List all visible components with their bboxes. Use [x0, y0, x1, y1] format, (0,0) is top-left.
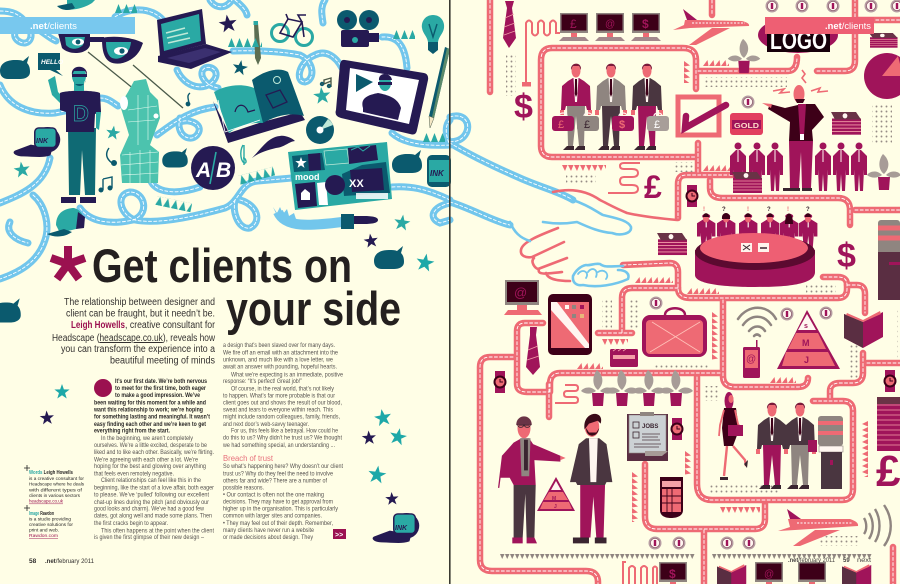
intro standfirst text: Headscape (headscape.co.uk), reveals how — [52, 333, 216, 344]
illustration: designer figure with D shirt: D — [73, 101, 89, 126]
meeting table with people: ? — [806, 207, 810, 213]
folio left: .net/february 2011 — [45, 558, 94, 565]
banner: .net/clients right — [765, 17, 874, 34]
article column one: want this relationship to work; we’re hoping — [93, 408, 203, 414]
title: Get clients on — [92, 239, 352, 292]
icon: coin above bag — [650, 296, 662, 310]
icon: music notes — [99, 78, 331, 192]
monitors row top — [559, 13, 661, 41]
meeting table with people: ! — [787, 207, 789, 213]
article column two: • Our contact is often not the one making — [223, 493, 324, 499]
icon: bottom cap — [47, 208, 85, 236]
icon: watch — [686, 185, 698, 207]
icon: pink briefcase — [642, 308, 707, 357]
three businessmen with briefcases: £ — [654, 119, 660, 131]
sidebar credits: Words Leigh Howells — [29, 470, 73, 476]
icon: pound sign right: £ — [876, 447, 900, 496]
icon: magenta asterisk — [51, 246, 85, 279]
icon: compact disc — [306, 116, 334, 144]
icon: small pyramid: J — [554, 504, 557, 510]
icon: sound waves — [864, 505, 891, 546]
article column one: the first cracks begin to appear. — [94, 521, 168, 527]
article column two: client goes out and shows the result of our blood, — [223, 400, 342, 406]
teal grass triangles — [115, 4, 445, 212]
icon: keypad card — [610, 349, 638, 367]
article column one: In the beginning, we aren’t completely — [101, 436, 193, 442]
illustration: designer figure with D shirt — [48, 67, 101, 203]
icon: S M J pyramid: J — [804, 355, 809, 365]
icon: moustache — [252, 136, 295, 158]
folio left: 58 — [29, 558, 37, 565]
article column one: easy finding each other and we’re keen to get — [94, 422, 206, 428]
icon: plant right — [867, 154, 900, 190]
article column two: For us, this feels like a betrayal. How could he — [231, 429, 339, 435]
woman with folder — [719, 392, 748, 480]
article column one: It’s our first date. We’re both nervous — [115, 379, 208, 385]
water cooler lower — [818, 416, 843, 489]
icon: bicycle — [272, 14, 312, 46]
intro standfirst text: beautiful meeting of minds — [110, 356, 215, 366]
article column two: possible reasons. — [223, 485, 264, 491]
article column two: • They may feel out of their depth. Remember, — [223, 521, 333, 527]
intro standfirst text: , creative consultant for — [125, 320, 216, 331]
icon: small pyramid: M — [552, 496, 556, 502]
icon: spilled ink pot, lower — [373, 513, 419, 543]
intro standfirst text — [52, 297, 216, 366]
folio right — [788, 558, 871, 564]
article column two: Breach of trust — [223, 454, 274, 463]
icon: laptop — [157, 9, 232, 69]
intro standfirst text: client can be fraught, but it needn’t be. — [66, 308, 215, 320]
decorative dots — [506, 54, 900, 546]
pink road network — [480, 0, 900, 584]
icon: cash stack near table — [657, 233, 687, 255]
meeting table with people: ! — [747, 207, 749, 213]
icon: light bulb — [422, 15, 444, 54]
meeting table with people — [695, 207, 817, 287]
water cooler top right — [878, 220, 900, 300]
article column two — [222, 343, 344, 541]
icon: open book — [213, 70, 305, 143]
article column one: to meet for the first time, both eager — [115, 386, 207, 392]
sidebar credits: creative solutions for — [29, 522, 73, 527]
article column one: beginning, like the start of a love affair, both eager — [94, 485, 214, 491]
meeting table with people: ? — [767, 207, 771, 213]
icon: dollar sign left: $ — [514, 88, 533, 126]
folio right: .net/february 2011 — [788, 558, 836, 564]
article column one: that feels even remotely negative. — [94, 471, 174, 477]
article column one: liked and to like each other. Basically, we’re flirting. — [94, 450, 214, 456]
title: your side — [226, 282, 401, 335]
icon: ink pot right: INK — [430, 169, 445, 178]
icon: moodboard: XX — [349, 178, 364, 190]
meeting table with people: ? — [722, 207, 726, 213]
icon: calculator — [660, 477, 683, 518]
icon: tablet device — [548, 294, 592, 355]
intro standfirst text: The relationship between designer and — [64, 297, 215, 308]
sidebar credits: is a studio providing — [29, 516, 71, 522]
article column two: common with larger sites and companies. — [223, 514, 322, 520]
article column two: We fire off an email with an attachment into the — [223, 350, 339, 356]
article column two: higher up in the organisation. This is particularly — [223, 507, 338, 513]
banner: .net/clients left — [0, 17, 135, 34]
icon: mobile phone: @ — [746, 354, 756, 365]
bottom monitors and books: @ — [764, 569, 774, 580]
sidebar credits: Rawdon.com — [29, 533, 58, 538]
article column one — [93, 379, 214, 541]
icons: speech bubbles — [0, 56, 422, 322]
article column two: do this to us? Why didn’t he trust us? We thought — [223, 436, 342, 442]
lower left stars — [39, 233, 436, 505]
icon: big checkmark box — [678, 97, 726, 135]
icon: tie left — [526, 327, 540, 375]
article column one: to please. We’ve ‘pulled’ following our excellent — [94, 493, 209, 499]
jobs clipboard: JOBS — [642, 424, 658, 430]
icon: aeroplane top — [673, 9, 749, 45]
intro standfirst text: Leigh Howells — [71, 320, 125, 331]
icon: watches mid row — [494, 370, 896, 440]
icon: coins top row — [766, 0, 900, 12]
article column two: sweat and tears to everyone within reach. This — [223, 407, 333, 413]
three businessmen with briefcases: $ — [619, 119, 625, 131]
icon: hello speech bubble: HELLO — [41, 59, 63, 66]
icon: cash stack by boss — [831, 112, 861, 135]
article column two: might include random colleagues, family, friends, — [223, 415, 340, 421]
article column two: trust us? Why do they feel the need to involve — [223, 471, 334, 477]
article column one: dates, got along well and made some plans. Then — [94, 514, 212, 520]
angry boss figure — [762, 70, 828, 191]
continue arrow box — [333, 529, 346, 539]
article column two: So what’s happening here? Why doesn’t our client — [223, 464, 343, 470]
sidebar credits: clients in various sectors — [29, 493, 81, 498]
icon: ink pot right — [427, 155, 451, 187]
icon: logo badge: LOGO — [770, 27, 827, 55]
monitors row top: $ — [642, 17, 649, 31]
continue arrow box: >> — [335, 532, 343, 539]
icon: glasses on sticks — [58, 33, 183, 108]
icon: aeroplane lower — [778, 509, 858, 546]
icon: paint brush — [273, 207, 378, 229]
three businessmen with briefcases: £ — [558, 119, 564, 131]
icon: monitor left with at sign — [504, 280, 542, 315]
article column two: await an answer with pounding, hopeful hearts. — [223, 365, 337, 371]
sidebar credits: with different types of — [29, 487, 83, 492]
icon: cash block right edge — [877, 397, 900, 451]
sidebar credits — [24, 465, 85, 538]
icon: gold bar: GOLD — [734, 121, 760, 130]
icon: pound sign: £ — [644, 169, 662, 205]
icon: A/B badge: A — [195, 159, 211, 182]
plants row — [581, 370, 693, 406]
icon: A/B badge: B — [216, 159, 231, 182]
article column two: Of course, in the real world, that’s not likely — [231, 386, 334, 392]
monitors row top: @ — [605, 19, 615, 30]
article column two: we had something special, an understanding ... — [222, 443, 335, 449]
article column one: We’re agreeing with each other a lot. We’re — [94, 457, 199, 463]
article column two: others far and wide? There are a number of — [223, 478, 327, 484]
icon: dollar sign right: $ — [837, 237, 856, 275]
icon: open book right — [844, 311, 883, 348]
icon: video tablet — [336, 60, 428, 135]
illustration: dress mannequin — [120, 79, 160, 183]
article column two: response: “It’s perfect! Great job!” — [223, 379, 302, 385]
banner: .net/clients left: .net/clients — [30, 21, 77, 32]
thin coils — [523, 20, 657, 584]
sidebar credits: is a creative consultant for — [29, 476, 84, 481]
two men pointing — [498, 414, 612, 543]
icon: moodboard: mood — [295, 172, 320, 182]
article column two: or made decisions about design. They — [223, 535, 313, 541]
article column two: to happen. What’s far more probable is that our — [223, 393, 335, 399]
drop cap circle — [94, 379, 112, 397]
icon: gold bar — [730, 113, 763, 135]
icon: cash stack front — [732, 172, 762, 193]
icon: stars top — [13, 13, 411, 231]
article column two: many clients have never run a website — [223, 528, 315, 534]
icon: spilled ink pot, lower: INK — [395, 525, 408, 532]
article column one: to make a good impression. We’ve — [115, 393, 201, 399]
icon: spilled ink pot, upper: INK — [36, 138, 49, 145]
icon: top cap — [57, 0, 95, 10]
icon: small pyramid — [537, 477, 575, 511]
article column two: decisions. They may have to get approval from — [223, 500, 333, 506]
blue road network — [0, 0, 573, 279]
three businessmen with briefcases: £ — [584, 119, 590, 131]
icon: monitor left with at sign: @ — [514, 285, 527, 300]
article column one: chat-up lines during the pitch (and obviously our — [94, 500, 209, 506]
icon: hello speech bubble — [38, 53, 63, 76]
two men talking — [756, 403, 817, 489]
icon: plant top — [728, 39, 760, 73]
article column two: What we’re expecting is an immediate, positive — [231, 372, 344, 378]
triangle trims — [500, 60, 872, 559]
article column one: Client relationships can feel like this in the — [101, 478, 202, 484]
small staff figures — [730, 142, 867, 191]
folio right: 59 — [843, 558, 850, 564]
article column one: This often happens at the point when the client — [101, 528, 214, 534]
jobs clipboard — [627, 412, 668, 461]
icon: logo badge — [758, 17, 838, 55]
article column one: been waiting for this moment for a while and — [94, 400, 206, 406]
title — [92, 239, 401, 335]
article column one: for something lasting and meaningful. It wasn’t — [94, 414, 210, 420]
icon: small pencil — [254, 21, 261, 65]
article column two: a design that’s been slaved over for many days. — [223, 343, 335, 349]
article column two: unknown, and much like with a love letter, we — [223, 358, 334, 364]
spine between pages — [449, 0, 451, 584]
bottom monitors and books: $ — [669, 567, 676, 581]
article column one: is given the first glimpse of their new design – — [94, 535, 205, 541]
icon: S M J pyramid: M — [802, 338, 810, 348]
icon: moodboard — [288, 142, 392, 210]
icon: top tie — [503, 1, 516, 48]
article column one: ourselves. We’re a little excited, desperate to be — [94, 443, 208, 449]
three businessmen with briefcases — [552, 64, 669, 150]
icon: single coin — [742, 96, 754, 108]
icon: S M J pyramid — [777, 310, 840, 369]
folio right: next — [857, 558, 871, 564]
article column one: hoping for the best and glowing over anything — [94, 464, 206, 470]
icon: coins near pyramid — [780, 306, 832, 320]
handshake illustration — [510, 190, 677, 286]
monitors row top: £ — [570, 17, 577, 31]
article column one: good looks and charm). We’ve had a good few — [94, 507, 205, 513]
sidebar credits: Image Rawdon — [29, 511, 54, 517]
intro standfirst text: you can transform the experience into a — [61, 344, 215, 355]
icon: film camera — [337, 10, 379, 47]
article column one: everything right from the start. — [94, 428, 170, 434]
sidebar credits: print and web. — [29, 528, 59, 532]
article column two: and next door’s web-savvy teenager. — [223, 422, 309, 428]
sidebar credits: headscape.co.uk — [29, 499, 64, 504]
icon: pie chart — [864, 53, 900, 99]
bottom monitors and books — [658, 562, 871, 584]
sidebar credits: Headscape where he deals — [29, 482, 85, 487]
icon: A/B badge — [191, 146, 235, 190]
banner: .net/clients right: .net/clients — [825, 21, 871, 32]
icons: coins bottom row — [648, 536, 756, 550]
icon: big pencil — [429, 47, 450, 128]
icon: S M J pyramid: s — [804, 323, 808, 330]
icon: spilled ink pot, upper — [14, 127, 60, 157]
meeting table with people: ! — [703, 207, 705, 213]
icon: cash stack top right — [869, 33, 898, 48]
icon: wifi waves — [738, 308, 776, 336]
icon: mobile phone — [743, 340, 760, 378]
